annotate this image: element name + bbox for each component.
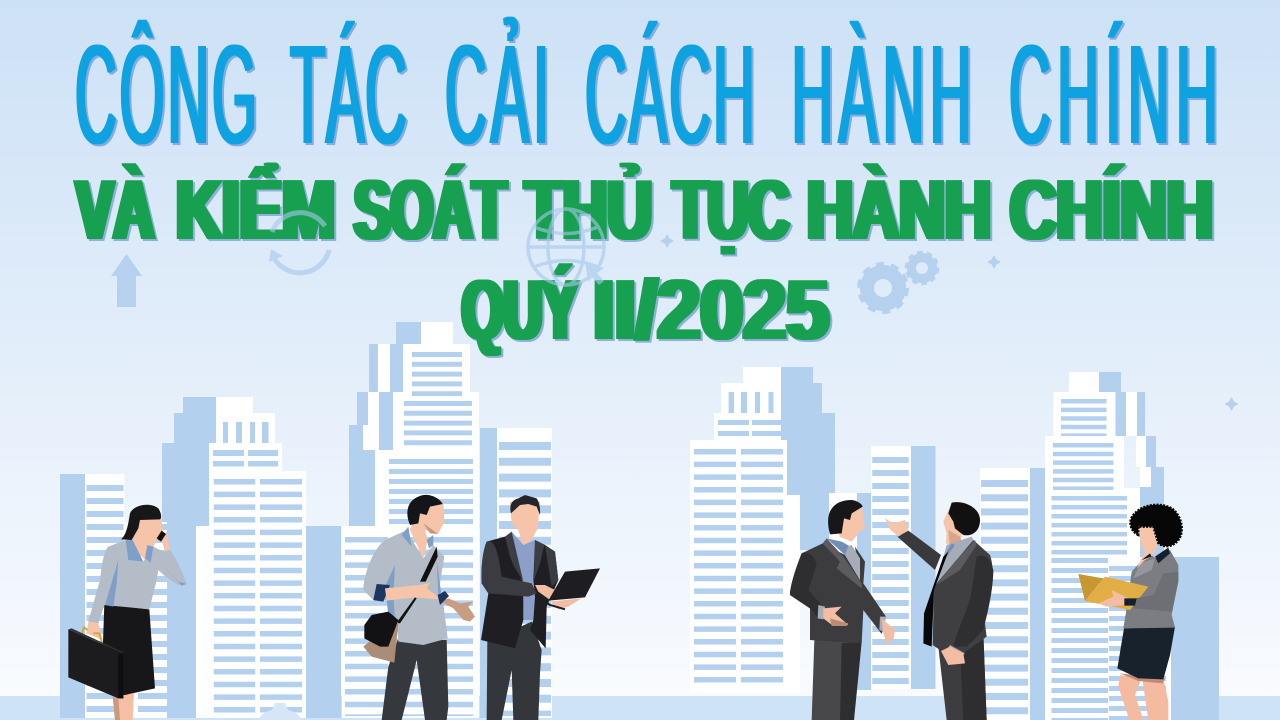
title: line two in green: SOÁT xyxy=(354,163,506,258)
man in suit pointing upward xyxy=(885,502,993,720)
title: line two in green: THỦ xyxy=(525,162,652,258)
title: line two in green: TỤC xyxy=(673,163,789,258)
icon: gears xyxy=(860,252,938,312)
man in suit gesturing forward xyxy=(790,500,895,720)
skyline: right buildings xyxy=(690,367,1219,720)
icon: up arrow xyxy=(111,254,142,307)
title: line two in green: HÀNH xyxy=(807,163,991,258)
woman on the phone with briefcase xyxy=(68,505,187,720)
icon: small sparkle xyxy=(660,234,674,248)
title: line two in green: KIỂM xyxy=(176,162,335,258)
icon: sparkle right xyxy=(987,255,1001,269)
title: line one in blue: TÁC xyxy=(290,15,407,173)
ground strip xyxy=(0,696,1280,720)
woman with yellow folder xyxy=(1078,505,1182,720)
title: line three in green: II/2025 xyxy=(593,263,829,358)
title: line one in blue: CÁCH xyxy=(585,15,755,173)
title: line one in blue: HÀNH xyxy=(792,15,971,173)
man in suit with laptop xyxy=(481,495,600,720)
man with messenger bag xyxy=(363,495,475,720)
icon: globe with cursor xyxy=(528,209,604,285)
title: line one in blue: CHÍNH xyxy=(1009,15,1218,173)
title: line three in green: QUÝ xyxy=(462,263,578,358)
title: line one in blue: CẢI xyxy=(445,15,549,173)
title: line two in green: VÀ xyxy=(76,163,154,258)
title: line three in green xyxy=(462,263,829,358)
title: line two in green: CHÍNH xyxy=(1010,163,1213,258)
title: line one in blue: CÔNG xyxy=(75,15,257,173)
icon: sparkle far right xyxy=(1224,397,1238,411)
title: line one in blue xyxy=(75,15,1218,173)
skyline: left buildings xyxy=(60,322,552,718)
icon: partly hidden bottom gear xyxy=(258,703,302,720)
title: line two in green xyxy=(76,162,1213,258)
icon: refresh arrows xyxy=(269,213,329,273)
